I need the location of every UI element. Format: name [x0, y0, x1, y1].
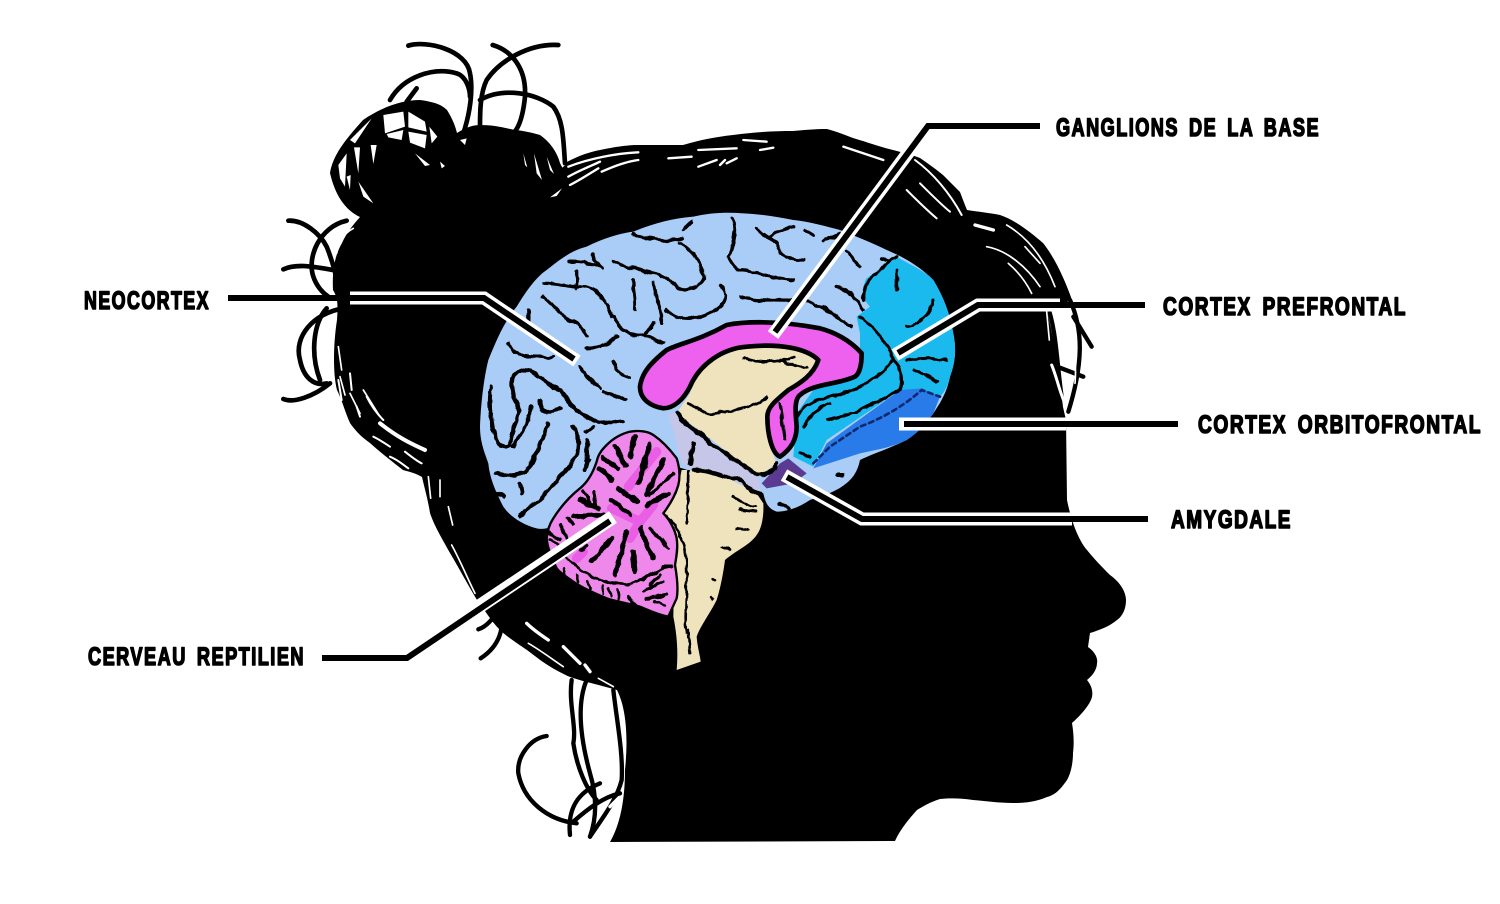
leader: amygdale — [784, 475, 1148, 519]
leader: cortex orbitofrontal — [899, 418, 1178, 430]
orbitofrontal dashed border — [813, 390, 940, 463]
brainstem — [663, 470, 763, 670]
sulci of the neocortex — [508, 218, 890, 400]
hair highlights: top of head — [568, 140, 883, 185]
lavender region — [668, 413, 762, 495]
thalamus — [677, 347, 818, 475]
hair strands: back of head and neck — [338, 373, 622, 837]
ganglions de la base — [640, 322, 862, 457]
head silhouette — [330, 100, 1126, 842]
cerveau reptilien — [547, 431, 679, 617]
label: ganglions de la base: GANGLIONS DE LA BASE — [1056, 114, 1320, 142]
prefrontal folds — [797, 257, 947, 457]
neocortex — [480, 213, 955, 529]
hair strands: top and forehead — [907, 160, 1092, 412]
brain — [480, 213, 955, 670]
label: amygdale: AMYGDALE — [1171, 506, 1292, 534]
amygdale — [762, 458, 807, 488]
cortex orbitofrontal — [813, 388, 940, 468]
cortex prefrontal — [793, 257, 955, 467]
leader: ganglions de la base — [773, 126, 1040, 335]
label: cerveau reptilien: CERVEAU REPTILIEN — [88, 643, 305, 671]
hair highlights: left side — [337, 228, 380, 417]
hair: bun mesh gaps — [338, 112, 562, 203]
label: cortex prefrontal: CORTEX PREFRONTAL — [1163, 293, 1407, 321]
leader: cortex prefrontal — [895, 305, 1145, 355]
leader: neocortex — [228, 298, 577, 361]
lines of the thalamus and brainstem — [667, 357, 807, 653]
hair strands: bun and left side — [283, 44, 590, 400]
leader: cerveau reptilien — [322, 517, 613, 658]
label: neocortex: NEOCORTEX — [84, 287, 210, 315]
leader lines — [228, 126, 1178, 658]
